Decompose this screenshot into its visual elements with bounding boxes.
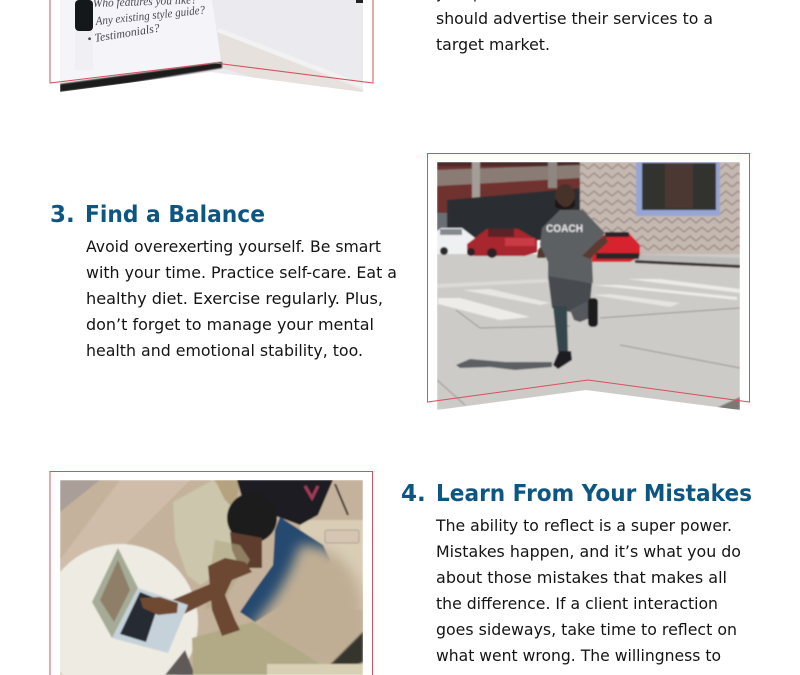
text: learn from mistakes body: what went wrong. The willingness to	[436, 646, 721, 665]
crosswalk stripes	[438, 298, 530, 320]
text: find a balance body: with your time. Practice self-care. Eat a	[86, 263, 397, 282]
handwritten notes	[88, 0, 205, 42]
runner	[537, 184, 608, 369]
text: learn from mistakes body: goes sideways, take time to reflect on	[436, 620, 737, 639]
handwritten notes: • Testimonials?	[86, 21, 161, 46]
photo: man running across street	[437, 162, 740, 410]
text: find a balance body: don’t forget to manage your mental	[86, 315, 374, 334]
cracks	[437, 308, 740, 405]
heading: 3. Find a Balance: Find a Balance	[85, 202, 265, 228]
text: find a balance body: healthy diet. Exercise regularly. Plus,	[86, 289, 383, 308]
handwritten notes: Any existing style guide?	[94, 3, 206, 28]
text: learn from mistakes body: about those mistakes that makes all	[436, 568, 727, 587]
text: find a balance body: Avoid overexerting yourself. Be smart	[86, 237, 381, 256]
frame: notebook photo	[50, 0, 373, 83]
heading: 4. Learn From Your Mistakes: Learn From Your Mistakes	[436, 481, 752, 507]
heading: 3. Find a Balance: 3.	[50, 202, 75, 228]
icon: pen	[75, 0, 93, 31]
heading: 4. Learn From Your Mistakes: 4.	[401, 481, 426, 507]
torso	[240, 517, 330, 622]
text: learn from mistakes body: The ability to reflect is a super power.	[435, 516, 732, 535]
frame: laptop photo	[50, 472, 372, 675]
arms	[208, 558, 252, 636]
text: learn from mistakes body: Mistakes happen, and it’s what you do	[436, 542, 741, 561]
text: learn from mistakes body	[435, 516, 741, 675]
window	[636, 162, 720, 216]
laptop	[92, 548, 138, 638]
armchair	[173, 480, 232, 585]
text: section 2 ending: target market.	[436, 35, 550, 54]
runner: COACH	[546, 223, 583, 235]
text: learn from mistakes body: the difference. If a client interaction	[436, 594, 718, 613]
frame: runner photo	[428, 154, 750, 402]
photo: notebook on desk	[60, 0, 363, 92]
text: find a balance body: health and emotional stability, too.	[86, 341, 363, 360]
text: find a balance body	[86, 237, 397, 360]
cars	[437, 228, 475, 255]
text: section 2 ending: should advertise their services to a	[436, 9, 713, 28]
wall pattern	[580, 162, 740, 255]
head	[227, 493, 277, 543]
text: section 2 ending	[436, 0, 713, 54]
backpack	[237, 480, 333, 525]
table	[60, 543, 199, 675]
road	[437, 254, 740, 410]
shadow	[456, 359, 552, 370]
photo: man using laptop at table	[42, 480, 363, 675]
legs	[192, 622, 327, 675]
